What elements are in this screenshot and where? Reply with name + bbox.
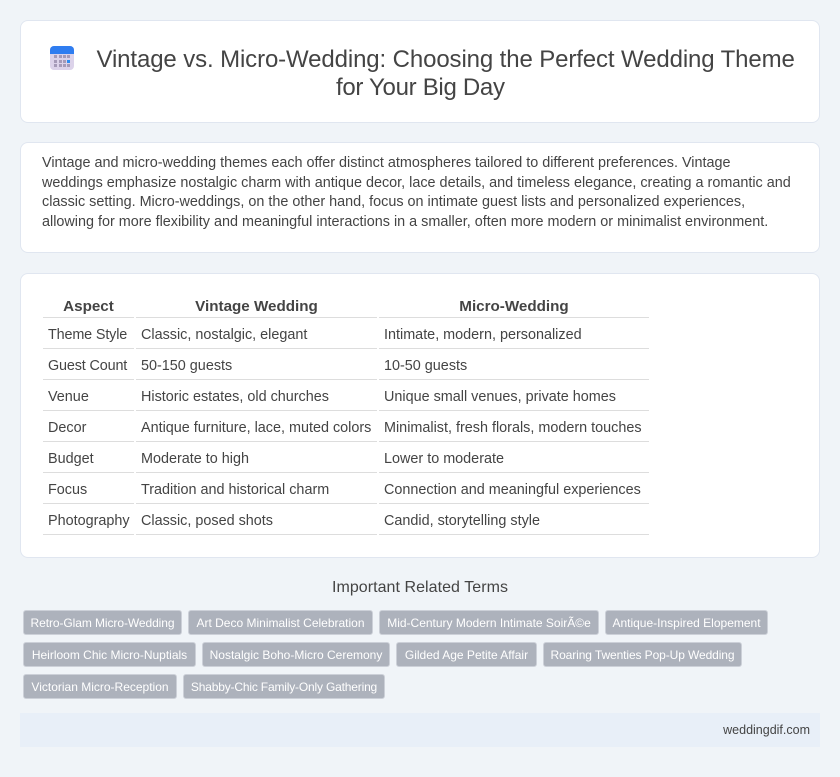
related terms heading: Important Related Terms: [332, 579, 508, 596]
comparison table: Photography: [48, 513, 130, 529]
title: for Your Big Day: [336, 74, 505, 101]
related terms tags: Shabby-Chic Family-Only Gathering: [191, 680, 377, 694]
comparison table: Minimalist, fresh florals, modern touches: [384, 420, 642, 436]
related terms tags: Heirloom Chic Micro-Nuptials: [32, 648, 187, 662]
comparison table: Antique furniture, lace, muted colors: [141, 420, 371, 436]
comparison table: Focus: [48, 482, 87, 498]
comparison table: Guest Count: [48, 358, 127, 374]
comparison table: Tradition and historical charm: [141, 482, 329, 498]
footer: [20, 713, 820, 747]
related terms tags: Nostalgic Boho-Micro Ceremony: [210, 648, 382, 662]
comparison table: Historic estates, old churches: [141, 389, 329, 405]
comparison table: Intimate, modern, personalized: [384, 327, 582, 343]
comparison table: Venue: [48, 389, 89, 405]
comparison table: 50-150 guests: [141, 358, 232, 374]
comparison table: Theme Style: [48, 327, 127, 343]
comparison table: [43, 298, 649, 535]
related terms tags: Gilded Age Petite Affair: [405, 648, 528, 662]
title: Vintage vs. Micro-Wedding: Choosing the Perfect Wedding Theme: [96, 46, 795, 73]
comparison table: 10-50 guests: [384, 358, 467, 374]
comparison table: Budget: [48, 451, 94, 467]
intro text: classic setting. Micro-weddings, on the other hand, focus on intimate guest lists and personalized experiences,: [42, 194, 745, 210]
intro panel: [20, 142, 820, 253]
comparison table: Lower to moderate: [384, 451, 504, 467]
comparison table: Aspect: [63, 298, 114, 315]
related terms tags: Victorian Micro-Reception: [31, 680, 169, 694]
intro text: [42, 155, 791, 230]
footer credit: weddingdif.com: [723, 723, 810, 737]
related terms tags: Retro-Glam Micro-Wedding: [31, 616, 174, 630]
comparison table: Moderate to high: [141, 451, 249, 467]
related terms tags: [23, 610, 768, 699]
comparison table: Classic, nostalgic, elegant: [141, 327, 307, 343]
comparison table: Vintage Wedding: [195, 298, 318, 315]
related terms tags: Mid-Century Modern Intimate SoirÃ©e: [387, 616, 591, 630]
related terms tags: Antique-Inspired Elopement: [612, 616, 761, 630]
intro text: weddings emphasize nostalgic charm with antique decor, lace details, and timeless elegance, creating a romantic and: [42, 175, 791, 191]
comparison table: Decor: [48, 420, 86, 436]
comparison table panel: [20, 273, 820, 558]
header panel: [20, 20, 820, 123]
icon: calendar: [50, 46, 74, 70]
related terms tags: Art Deco Minimalist Celebration: [196, 616, 365, 630]
comparison table: Classic, posed shots: [141, 513, 273, 529]
title: [96, 46, 795, 101]
comparison table: Candid, storytelling style: [384, 513, 540, 529]
comparison table: Connection and meaningful experiences: [384, 482, 641, 498]
intro text: allowing for more flexibility and meaningful interactions in a smaller, often more modern or minimalist environment.: [42, 214, 768, 230]
intro text: Vintage and micro-wedding themes each offer distinct atmospheres tailored to different preferences. Vintage: [42, 155, 730, 171]
comparison table: Micro-Wedding: [459, 298, 569, 315]
related terms tags: Roaring Twenties Pop-Up Wedding: [551, 648, 734, 662]
comparison table: Unique small venues, private homes: [384, 389, 616, 405]
